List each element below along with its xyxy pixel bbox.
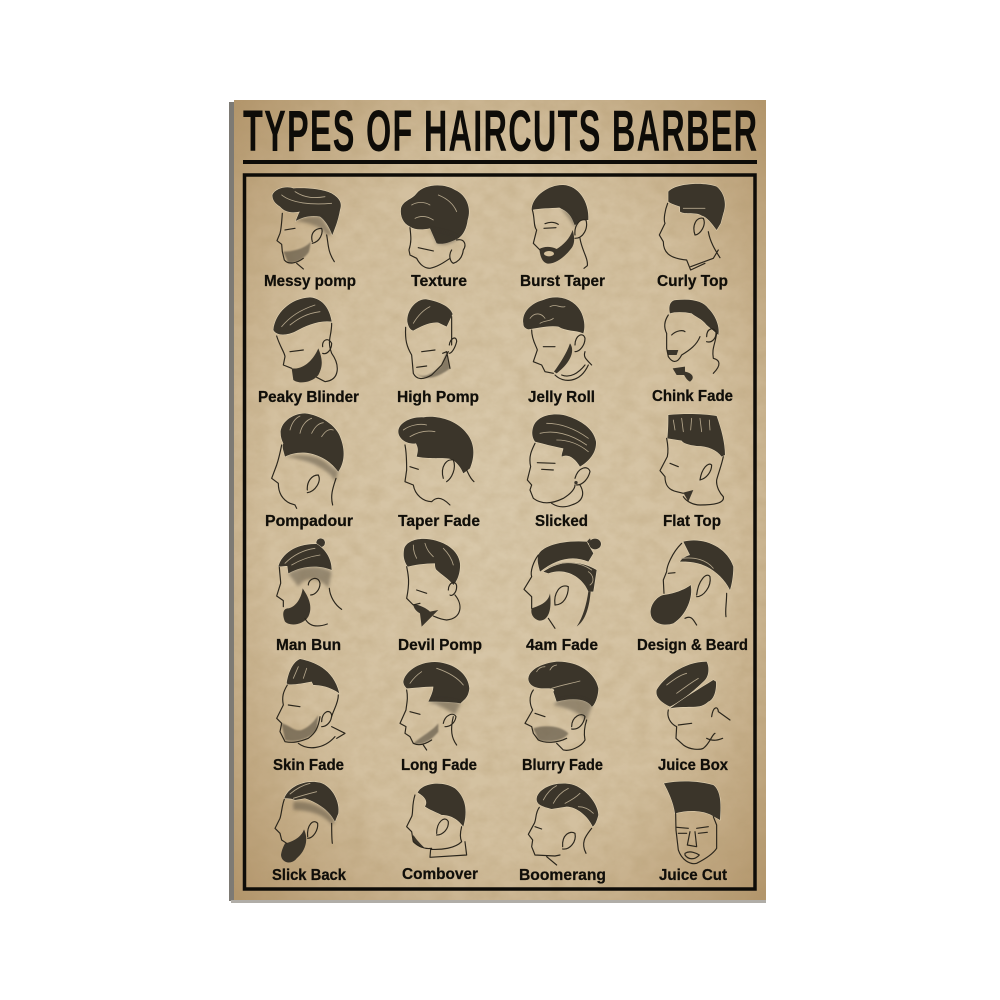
- haircut: Man Bun: [276, 538, 342, 654]
- haircut: Pompadour: [265, 413, 353, 530]
- label: Juice Box: Juice Box: [658, 757, 728, 774]
- label: Juice Cut: Juice Cut: [659, 867, 728, 884]
- icon: Jelly Roll head: [523, 297, 592, 380]
- icon: Slicked head: [527, 414, 596, 507]
- label: Man Bun: Man Bun: [276, 637, 341, 654]
- label: Peaky Blinder: Peaky Blinder: [258, 389, 359, 406]
- haircut: Flat Top: [660, 414, 725, 530]
- icon: Blurry Fade head: [525, 662, 598, 750]
- haircut: Slick Back: [272, 782, 346, 884]
- haircut: Burst Taper: [520, 185, 605, 290]
- haircut: Boomerang: [519, 784, 606, 884]
- title rule: [243, 160, 757, 164]
- icon: Man Bun head: [277, 538, 342, 626]
- label: Skin Fade: Skin Fade: [273, 757, 344, 774]
- haircut: Devil Pomp: [398, 539, 482, 654]
- label: Devil Pomp: Devil Pomp: [398, 637, 482, 654]
- icon: Devil Pomp head: [404, 539, 460, 627]
- icon: Peaky Blinder head: [273, 297, 337, 382]
- haircut: Texture: [401, 185, 469, 290]
- icon: Pompadour head: [272, 413, 344, 508]
- icon: Burst Taper head: [532, 185, 588, 268]
- label: Taper Fade: Taper Fade: [398, 513, 480, 530]
- icon: Texture head: [401, 185, 469, 268]
- label: Jelly Roll: Jelly Roll: [528, 389, 595, 406]
- poster shadow: [229, 102, 766, 903]
- icon: Slick Back head: [275, 782, 339, 862]
- label: Pompadour: Pompadour: [265, 513, 353, 530]
- haircut: High Pomp: [397, 299, 479, 406]
- icon: Messy pomp head: [272, 187, 341, 269]
- label: Blurry Fade: Blurry Fade: [522, 757, 603, 774]
- haircut: Juice Cut: [659, 781, 728, 884]
- icon: Chink Fade head: [665, 300, 719, 382]
- icon: Boomerang head: [528, 784, 598, 865]
- haircut: Jelly Roll: [523, 297, 595, 406]
- chart frame: [244, 175, 755, 889]
- label: Slick Back: Slick Back: [272, 867, 346, 884]
- title: TYPES OF HAIRCUTS BARBER: [243, 98, 757, 163]
- icon: 4am Fade head: [524, 538, 601, 628]
- label: High Pomp: High Pomp: [397, 389, 479, 406]
- icon: Flat Top head: [660, 414, 725, 505]
- haircut: Blurry Fade: [522, 662, 603, 774]
- label: Boomerang: Boomerang: [519, 867, 606, 884]
- icon: Design and Beard head: [651, 540, 733, 625]
- haircut: Curly Top: [657, 184, 728, 290]
- haircut: Messy pomp: [264, 187, 356, 290]
- haircut: 4am Fade: [524, 538, 601, 654]
- icon: Juice Box head: [656, 662, 730, 749]
- label: Flat Top: Flat Top: [663, 513, 721, 530]
- haircut: Peaky Blinder: [258, 297, 359, 406]
- haircut: Chink Fade: [652, 300, 733, 405]
- label: Texture: Texture: [411, 273, 467, 290]
- icon: Taper Fade head: [398, 417, 474, 505]
- label: Curly Top: Curly Top: [657, 273, 728, 290]
- icon: Combover head: [407, 784, 467, 857]
- label: Long Fade: Long Fade: [401, 757, 477, 774]
- label: Chink Fade: Chink Fade: [652, 388, 733, 405]
- label: Slicked: Slicked: [535, 513, 588, 530]
- icon: Juice Cut head: [664, 781, 721, 864]
- icon: Curly Top head: [659, 184, 725, 270]
- icon: High Pomp head: [406, 299, 457, 379]
- label: Burst Taper: Burst Taper: [520, 273, 605, 290]
- haircut: Slicked: [527, 414, 596, 530]
- label: Messy pomp: Messy pomp: [264, 273, 356, 290]
- haircut: Design & Beard: [637, 540, 748, 654]
- haircut: Juice Box: [656, 662, 730, 774]
- haircut: Combover: [402, 784, 478, 883]
- haircut: Skin Fade: [273, 659, 345, 774]
- label: 4am Fade: 4am Fade: [526, 637, 598, 654]
- haircut: Taper Fade: [398, 417, 480, 530]
- poster panel: [234, 98, 766, 900]
- haircut: Long Fade: [400, 662, 477, 774]
- icon: Skin Fade head: [277, 659, 345, 748]
- label: Design & Beard: Design & Beard: [637, 637, 748, 654]
- label: Combover: Combover: [402, 866, 478, 883]
- icon: Long Fade head: [400, 662, 469, 750]
